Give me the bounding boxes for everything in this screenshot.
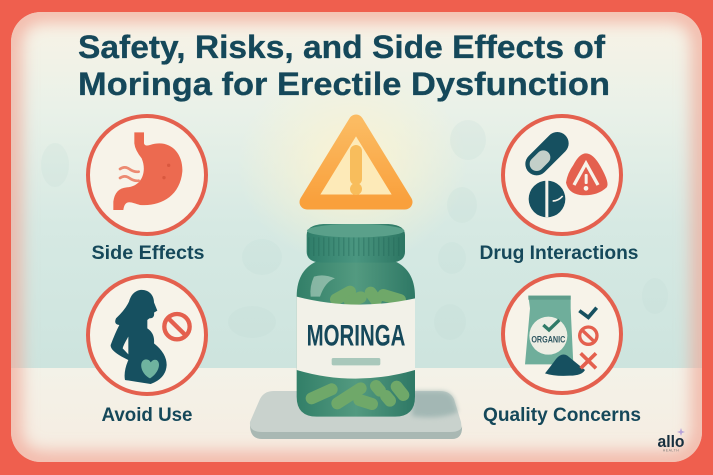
bottle body [297, 260, 415, 417]
platform [250, 391, 462, 439]
bottle label [297, 297, 415, 379]
title: Safety, Risks, and Side Effects of [78, 29, 605, 65]
moringa bottle [297, 224, 415, 417]
warning triangle icon [307, 122, 405, 202]
avoid use label: Avoid Use [102, 405, 192, 426]
cap top [307, 224, 404, 237]
allo health logo: HEALTH [663, 448, 679, 452]
faint background organ shapes [41, 120, 668, 340]
package [525, 296, 573, 364]
bottle highlight [310, 275, 335, 297]
warning badge [566, 153, 608, 195]
label bar [332, 358, 380, 365]
quality concerns icon: ORGANIC [531, 334, 566, 344]
prohibition [580, 327, 597, 344]
pregnant silhouette [111, 290, 167, 384]
title [78, 29, 610, 102]
check [579, 308, 597, 317]
stomach [113, 132, 182, 210]
side effects label: Side Effects [92, 243, 204, 264]
arm gap [123, 337, 128, 354]
title: Moringa for Erectile Dysfunction [78, 66, 610, 102]
capsule [537, 143, 557, 164]
drug interactions icon [503, 116, 621, 234]
side effects icon [88, 116, 206, 234]
quality concerns icon [503, 275, 621, 393]
cross [581, 353, 596, 368]
capsules [312, 292, 403, 404]
stomach spots [167, 164, 170, 167]
powder heap [545, 355, 585, 376]
label text: MORINGA [307, 320, 405, 353]
prohibition sign [164, 314, 190, 339]
nausea waves [120, 167, 139, 181]
avoid use icon [88, 276, 206, 394]
tablet [529, 181, 565, 217]
quality concerns label: Quality Concerns [483, 405, 641, 426]
bottle cap [307, 224, 405, 263]
drug interactions label: Drug Interactions [480, 243, 638, 264]
heart on belly [141, 359, 159, 378]
cap ridges [308, 219, 403, 275]
allo health logo: allo [658, 432, 684, 451]
